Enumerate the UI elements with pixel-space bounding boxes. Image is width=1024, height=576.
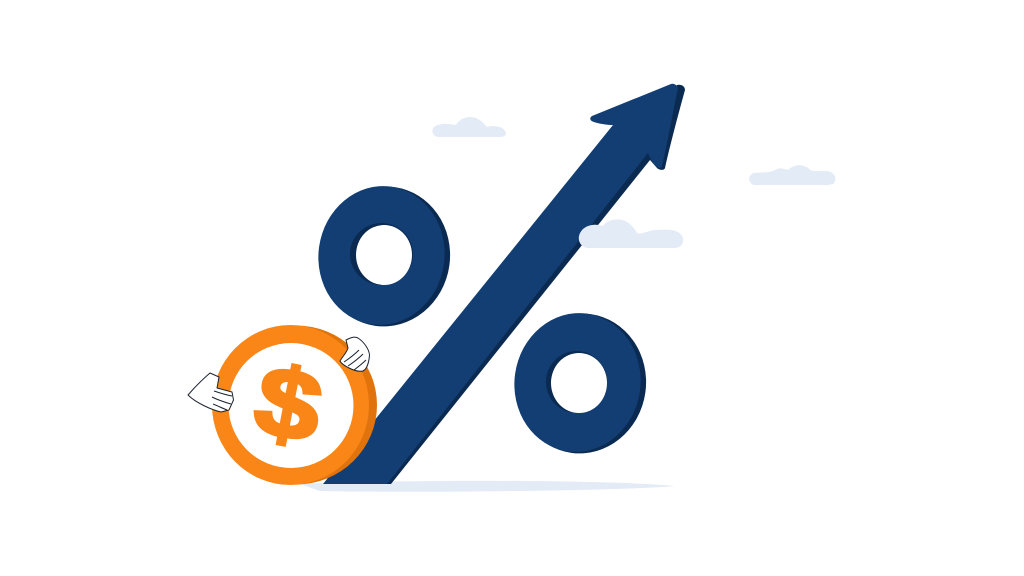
hand: left [188,373,234,412]
ground shadow [300,481,675,492]
percent ring: lower right [505,305,655,462]
cloud: right [749,165,835,185]
coin with dollar sign [212,325,377,485]
cloud: top centre [432,117,506,137]
dollar sign: $ [246,344,330,464]
cloud: in front of arrow [579,219,683,248]
percent ring: upper left [309,178,459,335]
arrow: slash of the percent sign [323,84,685,484]
hand: right [340,337,370,371]
